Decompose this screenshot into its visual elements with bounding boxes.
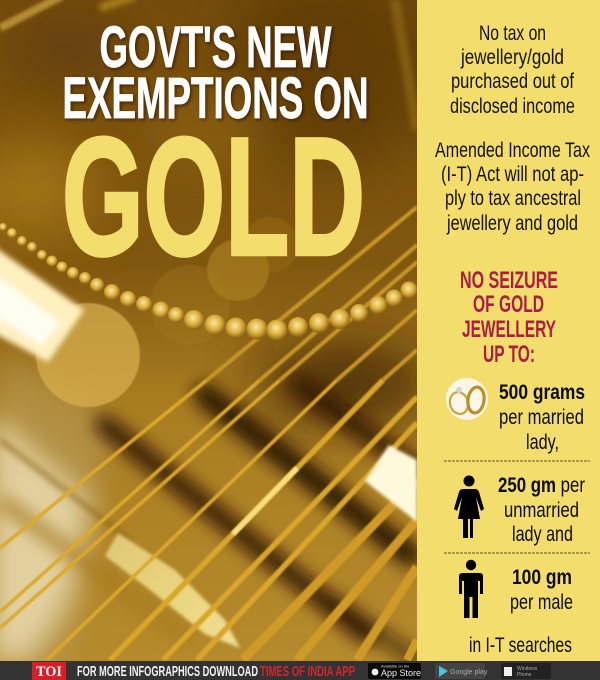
App Store badge <box>368 663 421 679</box>
text: 100 gm: 100 gm <box>512 565 572 589</box>
icon: woman <box>454 476 484 538</box>
text: 500 grams: lady, <box>526 430 559 454</box>
right yellow panel <box>417 0 600 661</box>
Windows Phone badge <box>501 663 551 679</box>
Google play badge: Google play <box>450 669 488 676</box>
icon: wedding rings <box>446 378 488 420</box>
Windows Phone badge: Phone <box>517 672 532 678</box>
text: 250 gm: unmarried <box>504 498 579 522</box>
title <box>62 15 368 131</box>
text: 100 gm: per male <box>510 590 573 614</box>
heading: no seizure: UP TO: <box>483 341 535 368</box>
pale lens reflection <box>105 533 240 648</box>
App Store badge: Available on the <box>381 664 410 668</box>
text block: no tax <box>450 21 575 118</box>
footer text: TIMES OF INDIA APP <box>260 663 355 680</box>
heading: no seizure <box>460 267 558 368</box>
title: EXEMPTIONS ON <box>62 66 368 131</box>
text: 250 gm: lady and <box>512 522 573 546</box>
heading: no seizure: OF GOLD <box>473 291 544 318</box>
icon: man <box>459 560 483 618</box>
text: 250 gm <box>498 473 585 546</box>
text block: no tax: jewellery/gold <box>460 45 564 69</box>
text: 250 gm: 250 gm per <box>498 473 585 497</box>
text: 500 grams <box>499 380 585 454</box>
Google play badge <box>435 663 488 679</box>
title: GOVT'S NEW <box>100 15 332 80</box>
Windows Phone badge: Windows <box>517 666 538 672</box>
text: 100 gm <box>510 565 573 614</box>
footer bar <box>0 661 600 680</box>
text block: ancestral jewellery <box>435 138 590 235</box>
gold bead chain <box>0 223 418 340</box>
title: GOLD: GOLD <box>62 102 365 290</box>
TOI logo: TOI <box>36 664 62 680</box>
text block: no tax: No tax on <box>479 21 546 45</box>
footer text: FOR MORE INFOGRAPHICS DOWNLOAD <box>77 663 258 680</box>
App Store badge: App Store <box>381 668 421 678</box>
background photo: gold chain and wires <box>0 0 440 661</box>
